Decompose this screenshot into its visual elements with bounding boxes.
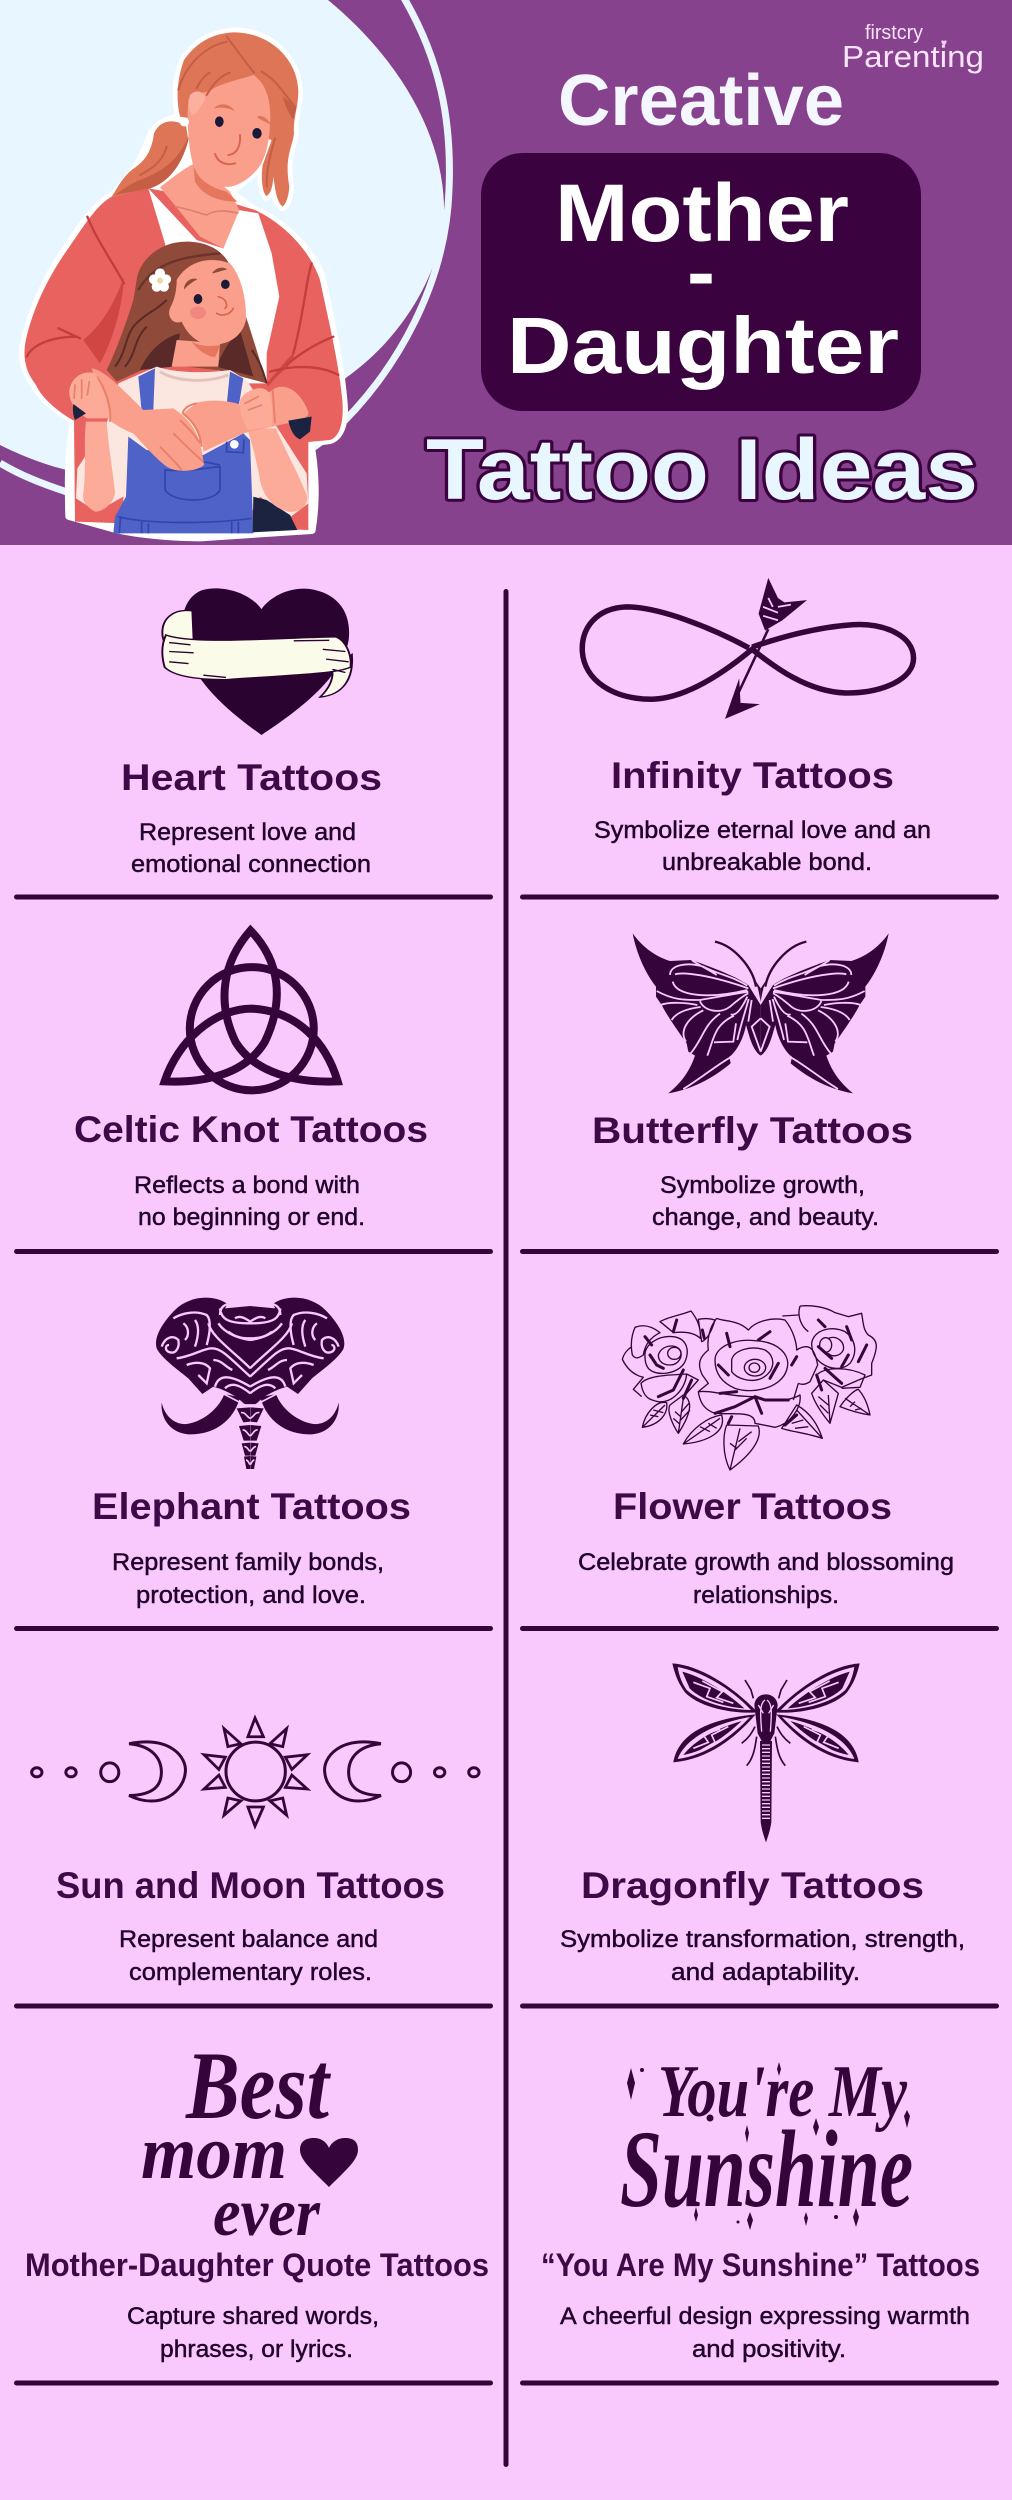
icon: celtic knot (165, 931, 338, 1090)
icon: dragonfly (672, 1663, 860, 1842)
icon: best mom ever lettering: mom (141, 2111, 287, 2195)
description: relationships. (693, 1582, 839, 1609)
description (594, 817, 931, 876)
description: A cheerful design expressing warmth (560, 2303, 970, 2330)
cuffs (73, 404, 312, 439)
icon: roses (622, 1306, 876, 1470)
description (560, 2303, 970, 2363)
girl t-shirt (76, 367, 308, 517)
panel: elephant tattoos (92, 1298, 411, 1609)
panel: you are my sunshine tattoos (541, 2051, 980, 2363)
title box: Mother - Daughter: Daughter (507, 301, 899, 390)
cardigan (24, 188, 343, 530)
heading: Infinity Tattoos (611, 755, 894, 796)
icon: best mom ever lettering: ever (213, 2174, 320, 2250)
description (112, 1549, 384, 1609)
description: Celebrate growth and blossoming (578, 1549, 954, 1576)
icon: you're my sunshine lettering: You're My (658, 2051, 908, 2133)
description: Capture shared words, (127, 2303, 379, 2330)
title box: Mother - Daughter (481, 153, 921, 411)
heading: Celtic Knot Tattoos (74, 1109, 428, 1150)
description: Symbolize growth, (660, 1172, 865, 1199)
title: Tattoo Ideas: Tattoo Ideas (426, 422, 978, 518)
heading: Dragonfly Tattoos (581, 1865, 924, 1906)
logo: firstcry parenting (842, 22, 984, 74)
description: Represent family bonds, (112, 1549, 384, 1576)
panel: sun and moon tattoos (32, 1718, 479, 1986)
panel: celtic knot tattoos (74, 931, 428, 1231)
description: emotional connection (131, 851, 371, 878)
hair back (178, 32, 298, 207)
description: complementary roles. (129, 1959, 372, 1986)
description (578, 1549, 954, 1609)
face (188, 75, 270, 187)
description: Symbolize eternal love and an (594, 817, 931, 844)
flower hair clip (149, 268, 171, 292)
description (134, 1172, 365, 1231)
logo: firstcry parenting: firstcry (865, 22, 923, 44)
description: Symbolize transformation, strength, (560, 1926, 965, 1953)
heading: Sun and Moon Tattoos (56, 1865, 445, 1906)
heading: Flower Tattoos (613, 1486, 892, 1527)
heading: “You Are My Sunshine” Tattoos (541, 2247, 980, 2283)
shirt (148, 188, 279, 383)
description (119, 1926, 378, 1986)
description: protection, and love. (136, 1582, 366, 1609)
description (127, 2303, 379, 2363)
panel: flower tattoos (578, 1306, 954, 1609)
description: and positivity. (692, 2336, 846, 2363)
icon: best mom ever lettering (141, 2032, 358, 2250)
icon: elephant (156, 1298, 344, 1469)
girl arms (83, 422, 307, 512)
heading: Heart Tattoos (121, 757, 382, 798)
logo: firstcry parenting: Parenting (842, 39, 984, 74)
mother arms and hands (183, 387, 309, 452)
description: change, and beauty. (652, 1204, 879, 1231)
panel: mother-daughter quote tattoos (25, 2032, 489, 2363)
title: Creative: Creative (558, 61, 844, 141)
description: and adaptability. (671, 1959, 860, 1986)
description (652, 1172, 879, 1231)
description: phrases, or lyrics. (160, 2336, 353, 2363)
panel: dragonfly tattoos (560, 1663, 965, 1986)
description: unbreakable bond. (662, 849, 872, 876)
icon: butterfly (633, 933, 889, 1093)
panel: header banner (0, 0, 1012, 545)
girl hair (107, 242, 267, 383)
illustration: mother and daughter (23, 32, 344, 537)
title box: Mother - Daughter: Mother (555, 168, 849, 259)
neck (160, 163, 239, 248)
icon: best mom ever lettering: Best (185, 2032, 332, 2139)
ponytail (112, 121, 188, 197)
panel: butterfly tattoos (592, 933, 913, 1231)
icon: you're my sunshine lettering (620, 2051, 913, 2230)
title box: Mother - Daughter: - (687, 227, 715, 318)
icon: infinity with arrow (582, 578, 914, 719)
description (560, 1926, 965, 1986)
icon: heart with ribbon (162, 588, 352, 735)
overalls (138, 368, 243, 412)
heading: Elephant Tattoos (92, 1486, 411, 1527)
girl hands (69, 372, 273, 430)
description: no beginning or end. (138, 1204, 365, 1231)
description: Represent balance and (119, 1926, 378, 1953)
heading: Butterfly Tattoos (592, 1110, 913, 1151)
panel: infinity tattoos (582, 578, 931, 876)
description: Reflects a bond with (134, 1172, 360, 1199)
girl face (169, 260, 246, 345)
heading: Mother-Daughter Quote Tattoos (25, 2247, 489, 2283)
panel: heart tattoos (121, 588, 382, 878)
description (131, 819, 371, 878)
icon: sun and moons (32, 1718, 479, 1826)
description: Represent love and (139, 819, 356, 846)
